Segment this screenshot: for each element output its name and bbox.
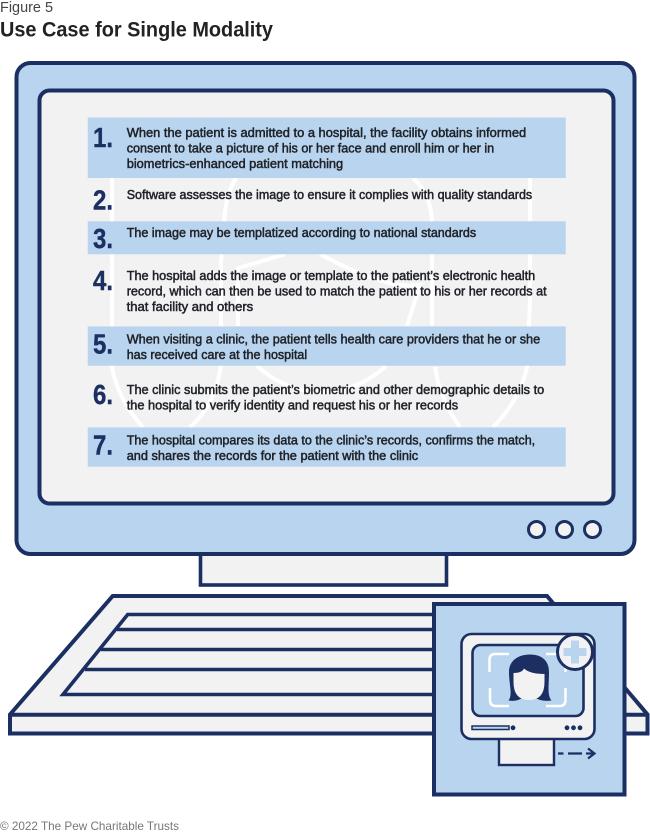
keyboard keys — [63, 614, 500, 694]
step 3 number: 3. — [93, 223, 113, 254]
step 1 band — [88, 118, 566, 178]
step 1 number: 1. — [93, 122, 113, 153]
step 1 text — [127, 125, 526, 171]
inset background — [434, 604, 624, 794]
step 7 text — [127, 432, 535, 463]
monitor screen — [40, 90, 614, 504]
icon: medical plus — [558, 634, 592, 670]
monitor — [16, 63, 634, 554]
kiosk screen — [472, 645, 584, 716]
copyright: © 2022 The Pew Charitable Trusts — [0, 819, 179, 833]
step 3 text: The image may be templatized according to national standards — [127, 225, 477, 240]
step 1 text: consent to take a picture of his or her face and enroll him or her in — [127, 140, 494, 156]
step 4 text — [127, 268, 547, 314]
keyboard body — [10, 596, 648, 734]
step 7 number: 7. — [93, 430, 113, 460]
step 5 — [88, 326, 566, 366]
step 4 number: 4. — [93, 265, 113, 296]
monitor bezel — [16, 63, 634, 554]
step 7 — [88, 427, 566, 467]
step 1 text: biometrics-enhanced patient matching — [127, 156, 343, 171]
icon: patient face — [508, 654, 552, 701]
monitor stand — [200, 550, 446, 585]
step 4 text: The hospital adds the image or template to the patient’s electronic health — [127, 268, 535, 283]
step 5 number: 5. — [93, 328, 113, 360]
step 7 text: The hospital compares its data to the clinic’s records, confirms the match, — [127, 432, 535, 447]
inset panel: biometric kiosk — [434, 604, 624, 794]
step 2 — [93, 184, 533, 216]
step 1 — [88, 118, 566, 178]
step 6 text: The clinic submits the patient’s biometric and other demographic details to — [127, 382, 544, 397]
keyboard front edge — [10, 713, 648, 717]
kiosk progress bar — [472, 725, 582, 730]
step 5 text: When visiting a clinic, the patient tells health care providers that he or she — [127, 331, 540, 346]
camera brackets — [490, 654, 566, 706]
arrow — [558, 748, 594, 758]
watermark: face outline — [112, 178, 530, 427]
keyboard — [10, 596, 648, 734]
step 3 — [88, 221, 566, 254]
step 3 band — [88, 221, 566, 254]
title: Use Case for Single Modality — [0, 18, 273, 42]
step 2 number: 2. — [93, 184, 113, 216]
kiosk stand — [499, 735, 554, 765]
step 4 text: record, which can then be used to match the patient to his or her records at — [127, 284, 547, 298]
step 5 text: has received care at the hospital — [127, 347, 307, 362]
monitor buttons — [528, 522, 600, 538]
step 4 text: that facility and others — [127, 299, 254, 314]
step 6 text — [127, 382, 544, 412]
step 7 band — [88, 427, 566, 467]
step 6 text: the hospital to verify identity and request his or her records — [127, 397, 459, 412]
step 2 text: Software assesses the image to ensure it complies with quality standards — [127, 187, 533, 202]
step 6 — [93, 379, 544, 412]
step 7 text: and shares the records for the patient with the clinic — [127, 448, 419, 463]
step 1 text: When the patient is admitted to a hospital, the facility obtains informed — [127, 125, 526, 140]
step 4 — [93, 265, 547, 314]
step 6 number: 6. — [93, 379, 113, 410]
step 5 band — [88, 326, 566, 366]
step 5 text — [127, 331, 540, 362]
kiosk body — [462, 634, 594, 739]
